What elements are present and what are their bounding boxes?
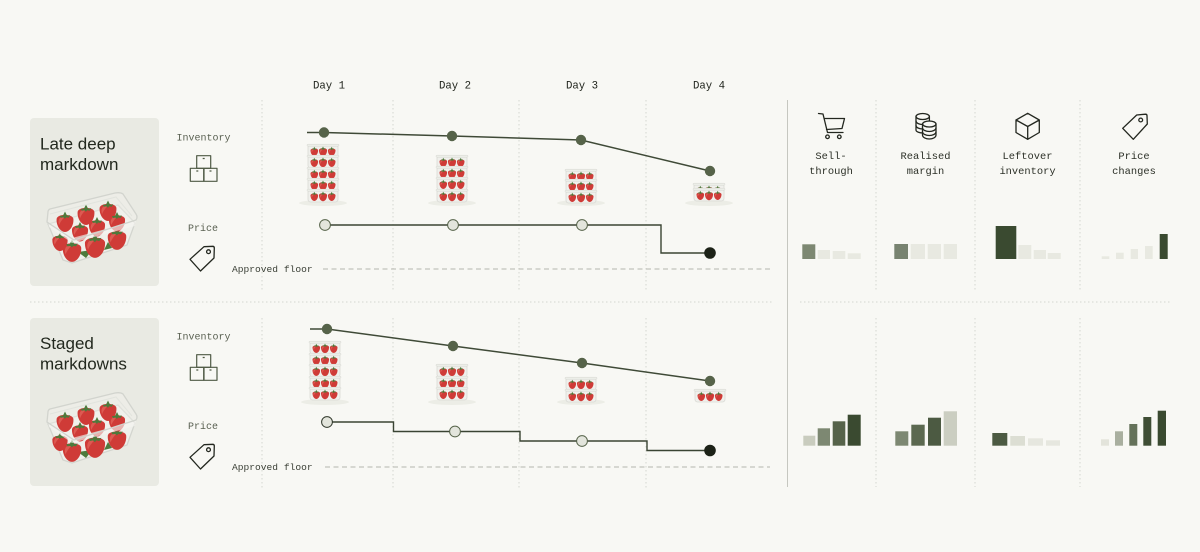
row labels: late deep markdown: Price	[188, 223, 218, 235]
inventory trays: late deep markdown	[299, 144, 733, 206]
day headers: Day 1	[313, 80, 345, 92]
metric: sell-through: Sell-	[815, 151, 847, 163]
row labels: late deep markdown	[176, 134, 231, 271]
row labels: staged markdowns	[176, 332, 231, 469]
bar chart: price changes, late deep markdown	[1102, 234, 1168, 259]
day headers	[313, 80, 725, 92]
inventory trays: staged markdowns	[301, 341, 726, 405]
metric: leftover inventory	[999, 113, 1056, 178]
inventory line: staged markdowns	[310, 324, 715, 386]
panel: late deep markdown: Late deep	[40, 134, 116, 154]
bar chart: price changes, staged markdowns	[1101, 411, 1166, 446]
panel: late deep markdown	[30, 118, 159, 286]
panel: staged markdowns	[30, 318, 159, 486]
approved floor: staged markdowns: Approved floor	[232, 462, 313, 473]
inventory line: late deep markdown	[307, 127, 715, 176]
grid dividers	[30, 100, 1170, 488]
approved floor: late deep markdown: Approved floor	[232, 264, 313, 275]
bar chart: leftover inventory, staged markdowns	[992, 433, 1060, 446]
metric: realised margin	[901, 114, 950, 178]
metric: leftover inventory: inventory	[999, 166, 1056, 178]
row labels: late deep markdown: Inventory	[176, 134, 231, 144]
metric: realised margin: margin	[907, 166, 944, 178]
row labels: staged markdowns: Price	[188, 421, 218, 433]
metric: sell-through	[809, 114, 853, 178]
day headers: Day 4	[693, 80, 725, 92]
day headers: Day 3	[566, 80, 598, 92]
bar chart: sell-through, staged markdowns	[803, 415, 861, 446]
metric: price changes: Price	[1118, 151, 1150, 163]
bar chart: leftover inventory, late deep markdown	[996, 226, 1061, 259]
metric: sell-through: through	[809, 166, 853, 178]
price line: late deep markdown	[320, 220, 716, 259]
metric: price changes	[1112, 114, 1156, 178]
row labels: staged markdowns: Inventory	[176, 332, 231, 344]
metric: realised margin: Realised	[901, 151, 950, 163]
bar chart: realised margin, staged markdowns	[895, 411, 957, 446]
bar chart: realised margin, late deep markdown	[894, 244, 957, 259]
panel: staged markdowns: markdowns	[40, 354, 127, 374]
panel: staged markdowns: Staged	[40, 334, 94, 353]
panel: late deep markdown: markdown	[40, 155, 118, 174]
metric: price changes: changes	[1112, 166, 1156, 178]
metric: leftover inventory: Leftover	[1003, 151, 1052, 163]
bar chart: sell-through, late deep markdown	[802, 244, 861, 259]
price line: staged markdowns	[322, 417, 716, 456]
day headers: Day 2	[439, 80, 471, 92]
